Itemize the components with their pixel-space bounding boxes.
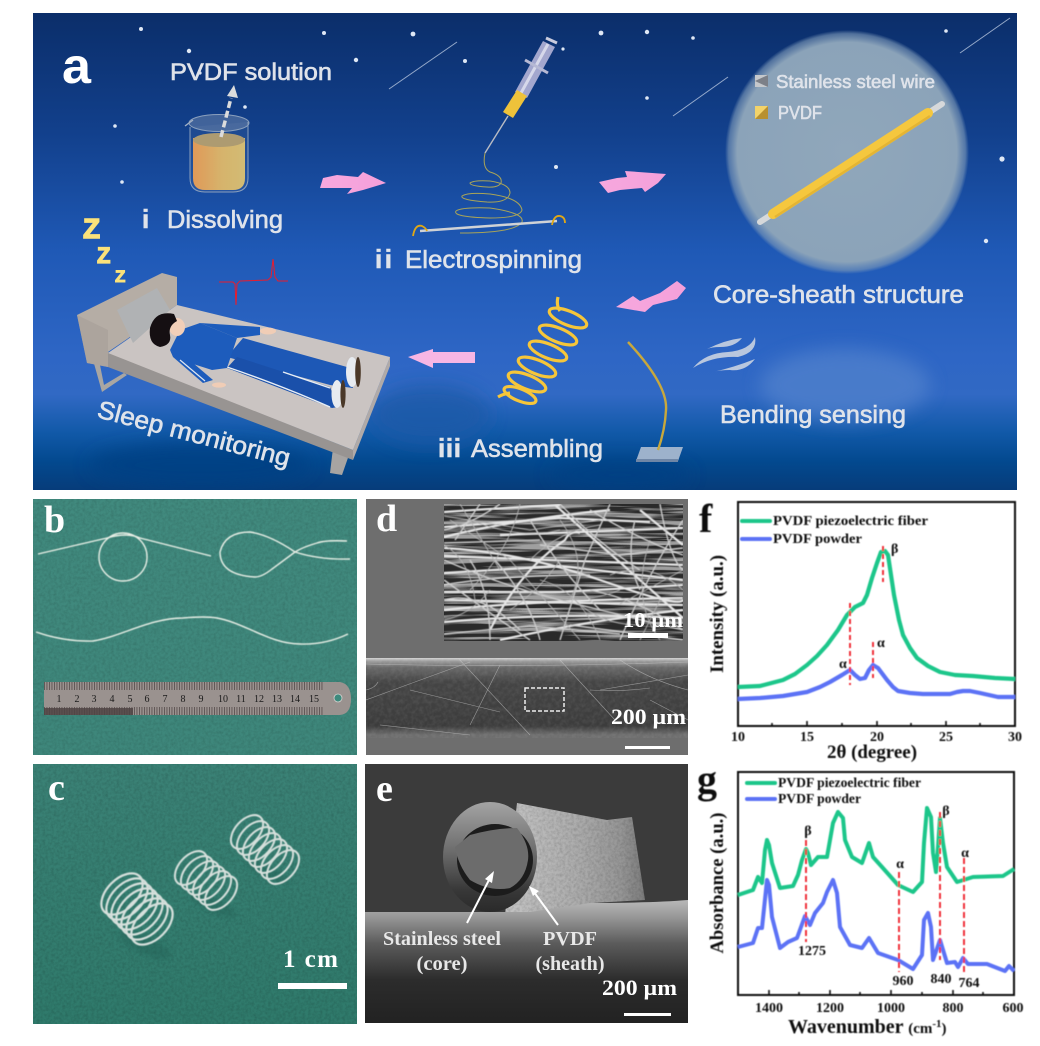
arrow: core-sheath to assembling — [616, 281, 686, 312]
ruler: 7 — [162, 694, 168, 705]
x tick labels: 25 — [939, 730, 953, 745]
legend: stainless steel wire: Stainless steel wire — [776, 72, 935, 92]
panel d: SEM of fiber surface — [366, 498, 688, 755]
x tick labels: 10 — [731, 730, 745, 745]
y axis title: Intensity (a.u.) — [707, 555, 728, 673]
x tick labels: 800 — [942, 1001, 964, 1016]
stainless steel core — [455, 828, 528, 889]
label: Core-sheath structure: Core-sheath structure — [713, 281, 964, 309]
scale bar: 200 um — [611, 704, 686, 749]
ruler: 3 — [92, 694, 96, 705]
label: ii Electrospinning: ii — [375, 244, 392, 274]
peak labels — [798, 804, 980, 991]
x tick labels: 15 — [800, 730, 814, 745]
x tick labels: 600 — [1002, 1001, 1024, 1016]
panel label f: f — [699, 496, 713, 541]
label: stainless steel core: (core) — [416, 953, 468, 975]
label: i Dissolving: i — [142, 204, 149, 234]
scale bar: 200 um: 200 µm — [611, 704, 686, 729]
ruler: 10 — [218, 694, 228, 705]
ruler: 12 — [254, 694, 264, 705]
label: PVDF solution: PVDF solution — [170, 59, 332, 86]
icon: sleeping person — [150, 313, 361, 408]
ruler: 2 — [74, 694, 80, 705]
curve: fiber XRD — [738, 551, 1015, 687]
spring 3 — [225, 809, 305, 890]
ruler: 15 — [309, 694, 319, 705]
fiber: core and sheath — [760, 104, 942, 222]
x tick labels: 1000 — [877, 1001, 905, 1016]
x tick labels — [755, 1001, 1024, 1016]
x axis title: Wavenumber (cm — [788, 1016, 932, 1038]
curve: powder XRD — [738, 665, 1015, 699]
ruler: 13 — [272, 694, 282, 705]
x tick labels: 1200 — [816, 1001, 844, 1016]
legend — [742, 513, 928, 546]
icon: beaker with PVDF solution — [185, 114, 249, 192]
chart f: XRD spectra — [699, 496, 1022, 763]
legend: PVDF — [755, 106, 822, 120]
legend: stainless steel wire — [755, 74, 934, 88]
ruler: 14 — [290, 694, 300, 705]
scale bar: 200 um — [603, 980, 677, 1016]
arrow: assembling to sleep monitoring — [408, 349, 475, 368]
fibers shaped into loops — [36, 532, 350, 644]
ruler: 5 — [128, 694, 132, 705]
icon: sleeping Z letters: Z — [115, 267, 125, 286]
chart: red sensor signal — [219, 259, 288, 305]
curve: powder FTIR — [738, 880, 1014, 971]
x tick labels — [731, 730, 1022, 745]
icon: sleeping Z letters: Z — [83, 213, 100, 244]
icon: sleeping Z letters — [83, 218, 126, 282]
spring 2 — [169, 845, 243, 916]
legend: PVDF powder — [778, 791, 861, 806]
peak labels: β — [804, 824, 812, 839]
x axis title: ) — [942, 1021, 947, 1037]
panel label a: a — [62, 38, 92, 94]
label: Sleep monitoring: Sleep monitoring — [94, 396, 293, 472]
ruler — [44, 682, 351, 715]
arrow: dissolving to electrospinning — [320, 172, 386, 194]
label: ii Electrospinning: Electrospinning — [405, 246, 582, 274]
peak labels: β — [942, 804, 950, 819]
peak labels: 1275 — [798, 944, 826, 959]
arrow: to sheath — [529, 886, 558, 925]
ruler: 11 — [236, 694, 246, 705]
panel label e: e — [376, 768, 393, 810]
peak labels: 840 — [930, 972, 952, 987]
arrow: solution to label — [221, 85, 238, 137]
icon: bending fiber on base — [628, 342, 683, 462]
legend: PVDF: PVDF — [778, 103, 822, 123]
label: iii Assembling: Assembling — [471, 435, 603, 463]
icon: pillow — [117, 288, 170, 343]
plot frame and axis ticks — [738, 772, 1014, 995]
x tick labels: 20 — [870, 730, 884, 745]
legend — [747, 775, 921, 806]
peak markers — [806, 812, 964, 973]
icon: electrospinning jet — [456, 153, 522, 233]
icon: bed — [77, 273, 390, 475]
legend: PVDF piezoelectric fiber — [778, 775, 921, 790]
peak labels: α — [877, 636, 885, 651]
scale bar: 200 um: 200 µm — [602, 975, 677, 1000]
peak labels: α — [961, 846, 969, 861]
peak labels: 960 — [892, 974, 914, 989]
icon: spring coil — [498, 297, 589, 407]
panel a: fabrication and application schematic — [33, 13, 1017, 490]
label: Bending sensing: Bending sensing — [720, 401, 906, 429]
peak labels: β — [891, 542, 898, 557]
callout: core-sheath fiber circle — [725, 30, 969, 274]
panel label c: c — [48, 767, 65, 809]
legend: PVDF powder — [773, 531, 862, 546]
peak markers — [850, 546, 883, 685]
panel b: photo of fibers and ruler — [33, 499, 357, 755]
y axis title: Absorbance (a.u.) — [707, 812, 728, 954]
inset: nanofiber mesh — [444, 504, 683, 641]
x tick labels: 1400 — [755, 1001, 783, 1016]
chart g: FTIR spectra — [697, 757, 1024, 1038]
label: iii Assembling: iii — [438, 433, 461, 463]
dashed selection box — [525, 688, 564, 711]
ruler: 6 — [144, 694, 150, 705]
panel c: photo of coiled springs — [33, 764, 357, 1024]
curve: fiber FTIR — [738, 808, 1014, 895]
x axis title: -1 — [932, 1018, 942, 1030]
label: stainless steel core — [383, 928, 501, 975]
ruler: 4 — [110, 694, 114, 705]
label: PVDF sheath — [536, 932, 604, 974]
panel label d: d — [376, 498, 397, 540]
icon: wind lines — [693, 337, 755, 372]
ruler: 1 — [56, 694, 62, 705]
spring 1 — [94, 866, 180, 952]
label: PVDF sheath: (sheath) — [536, 953, 604, 975]
spring shadows — [116, 856, 293, 965]
ruler: 9 — [198, 694, 204, 705]
label: i Dissolving: Dissolving — [167, 206, 283, 234]
arrow: to core — [467, 871, 494, 923]
peak labels: α — [896, 857, 904, 872]
legend: PVDF piezoelectric fiber — [773, 513, 928, 528]
x tick labels: 30 — [1008, 730, 1022, 745]
panel e: SEM cross-section — [365, 764, 688, 1023]
label: PVDF sheath: PVDF — [543, 928, 597, 950]
icon: collector rod — [413, 216, 565, 236]
scale bar: 10 um: 10 µm — [623, 608, 684, 632]
x axis title: 2θ (degree) — [827, 742, 917, 763]
peak labels — [839, 542, 898, 672]
peak labels: α — [839, 657, 847, 672]
label: stainless steel core: Stainless steel — [383, 928, 501, 950]
arrow: electrospinning to core-sheath — [599, 171, 666, 193]
icon: sleeping Z letters: Z — [97, 243, 110, 268]
icon: syringe — [485, 38, 557, 153]
scale bar: 1 cm: 1 cm — [283, 946, 338, 973]
ruler: 8 — [180, 694, 186, 705]
panel label b: b — [44, 499, 65, 541]
peak labels: 764 — [958, 976, 980, 991]
plot frame and axis ticks — [738, 502, 1015, 726]
scale bar: 1 cm — [278, 946, 347, 989]
panel label g: g — [697, 757, 717, 802]
